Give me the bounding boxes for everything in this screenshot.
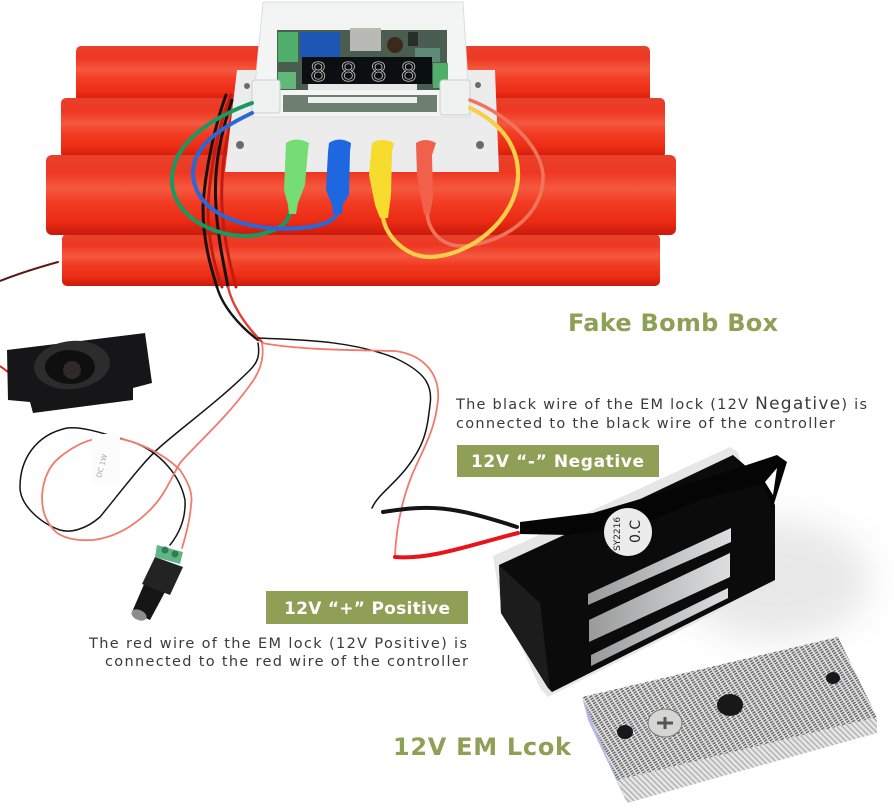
label: 12V positive: 12V “+” Positive xyxy=(284,599,450,619)
mounting holes xyxy=(617,672,840,739)
green plug xyxy=(284,140,309,214)
lock label sticker: 0.C xyxy=(628,520,644,543)
wire tag: DC 1W xyxy=(95,453,109,479)
lock label sticker xyxy=(604,508,652,556)
plate side left highlight xyxy=(582,697,627,803)
red lead xyxy=(395,533,518,557)
yellow plug xyxy=(369,140,394,218)
top red stick xyxy=(76,46,650,102)
second red stick xyxy=(61,98,665,158)
soft shadow of lock xyxy=(680,520,870,640)
red plug xyxy=(416,140,436,214)
lock label sticker: SY2216 xyxy=(613,517,623,551)
yellow wire xyxy=(383,108,518,257)
icon: DC power jack xyxy=(130,545,183,623)
coral wire xyxy=(427,100,543,246)
coloured jumper wires xyxy=(172,100,543,257)
label: 12V negative: 12V “-” Negative xyxy=(471,452,644,472)
power jack wires xyxy=(20,343,263,548)
lower window xyxy=(283,95,437,112)
left feed wire xyxy=(0,262,58,281)
black lead xyxy=(383,508,517,527)
relay xyxy=(300,32,340,58)
clear lid xyxy=(252,2,470,117)
panel: armature plate xyxy=(582,637,877,803)
green terminal bottom xyxy=(278,72,296,89)
lid edge xyxy=(308,97,417,103)
lid corners xyxy=(252,80,470,115)
LED display: 8888 xyxy=(310,58,417,88)
module xyxy=(350,28,381,51)
panel: fake bomb sticks xyxy=(46,46,676,286)
plate side xyxy=(582,697,877,803)
icon: speaker xyxy=(0,333,152,413)
bottom red stick xyxy=(62,234,660,286)
right terminal xyxy=(433,63,448,88)
wire bundle to controller xyxy=(203,95,262,342)
side face xyxy=(499,565,550,690)
green terminal top xyxy=(278,32,298,62)
mounting holes xyxy=(236,82,484,149)
armature bars xyxy=(588,528,731,666)
lid slit xyxy=(308,84,417,90)
green wire xyxy=(172,103,290,236)
strap opening xyxy=(765,468,777,495)
panel: EM lock xyxy=(383,447,787,697)
label: 12V positive xyxy=(266,591,468,624)
heading: Fake Bomb Box: Fake Bomb Box xyxy=(568,309,779,337)
long wires to EM lock xyxy=(258,338,438,555)
mounting flange xyxy=(225,70,499,172)
blue wire xyxy=(193,113,338,229)
wire tag xyxy=(92,434,120,484)
text: red wire description: connected to the red wire of the controller xyxy=(105,654,468,670)
screw xyxy=(648,709,682,737)
lock base plate xyxy=(493,447,775,697)
electronic parts xyxy=(387,32,440,62)
text: black wire description: connected to the black wire of the controller xyxy=(456,416,835,432)
text: red wire description: The red wire of the EM lock (12V Positive) is xyxy=(88,636,467,652)
banana plugs xyxy=(284,140,436,218)
circuit board xyxy=(277,30,447,90)
third red stick xyxy=(46,155,676,235)
blue plug xyxy=(326,140,351,214)
panel: controller box xyxy=(225,2,499,172)
text: black wire description: The black wire of the EM lock (12V Negative) is xyxy=(456,394,867,414)
knurled plate surface xyxy=(582,637,877,780)
lock body xyxy=(499,455,775,692)
label: 12V negative xyxy=(457,445,659,477)
ribbon and loop xyxy=(520,455,787,535)
heading: 12V EM Lcok: 12V EM Lcok xyxy=(393,733,572,761)
